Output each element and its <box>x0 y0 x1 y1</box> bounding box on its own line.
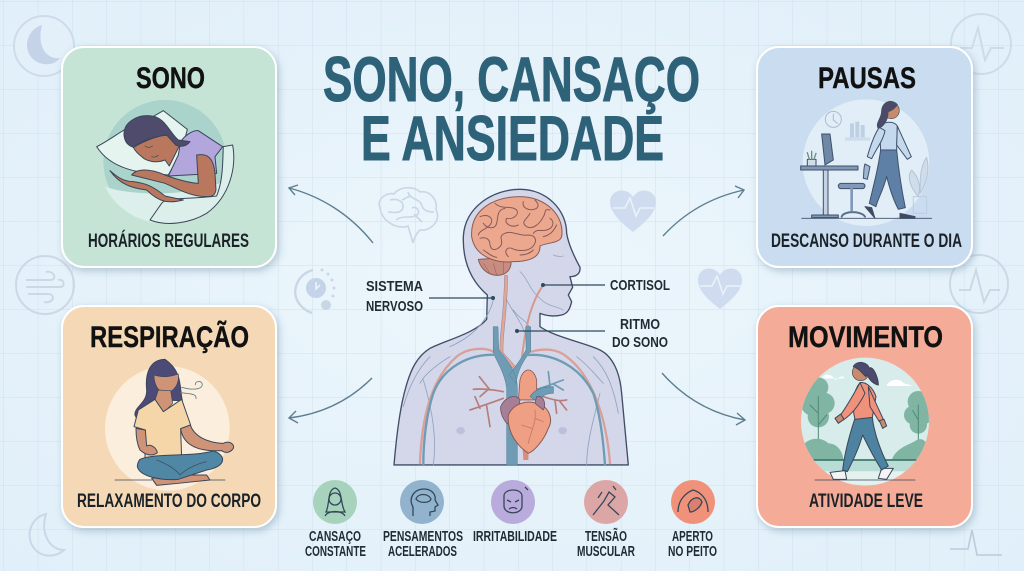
heading: pausas: PAUSAS <box>818 62 916 95</box>
decorative icon: heart with pulse <box>698 269 742 309</box>
body silhouette <box>394 189 628 465</box>
symptom: aperto no peito: APERTO <box>672 529 713 545</box>
illustration: sleeping woman <box>97 100 234 223</box>
decorative icon: wind circle left <box>16 256 74 314</box>
caption: atividade leve: ATIVIDADE LEVE <box>809 491 923 512</box>
panel: movimento <box>757 306 972 527</box>
illustration: woman meditating <box>105 359 234 491</box>
symptom: tensao muscular: MUSCULAR <box>577 544 635 560</box>
nipples <box>456 427 567 434</box>
decorative icon: moon top left <box>14 16 74 76</box>
title: E ANSIEDADE <box>361 104 664 174</box>
label: cortisol <box>541 277 670 294</box>
heading: sono: SONO <box>136 62 205 95</box>
symptom: pensamentos acelerados <box>383 480 463 560</box>
nerves <box>403 300 618 465</box>
panel: sono <box>62 47 276 267</box>
caption: relaxamento do corpo: RELAXAMENTO DO CORPO <box>77 491 261 512</box>
symptom: irritabilidade <box>473 480 557 545</box>
symptom: tensao muscular: TENSÃO <box>585 527 627 545</box>
label: sistema nervoso: SISTEMA <box>366 278 423 295</box>
heading: respiracao: RESPIRAÇÃO <box>90 320 249 354</box>
arrow: to sono <box>289 185 373 243</box>
title <box>323 45 700 174</box>
symptom: tensao muscular <box>577 480 635 560</box>
label: ritmo do sono: DO SONO <box>612 334 668 351</box>
label: ritmo do sono: RITMO <box>620 316 660 333</box>
decorative icon: clock bulb <box>295 268 336 313</box>
decorative icon: moon bottom left <box>30 514 64 556</box>
arrow: to respiracao <box>289 378 372 423</box>
brain <box>472 197 562 275</box>
heading: movimento: MOVIMENTO <box>788 321 943 354</box>
label: sistema nervoso <box>366 278 495 315</box>
pink vessels <box>420 277 610 463</box>
central human figure <box>394 189 628 465</box>
panel: pausas <box>757 47 972 267</box>
heart <box>501 397 520 427</box>
symptom: cansaco constante: CONSTANTE <box>305 544 366 560</box>
label: ritmo do sono <box>515 316 668 351</box>
arrow: to pausas <box>663 186 744 236</box>
decorative icon: heart <box>610 191 656 232</box>
decorative icon: pulse line bottom right <box>950 530 1002 555</box>
title: SONO, CANSAÇO <box>323 45 700 115</box>
decorative icon: pulse circle right <box>950 255 1008 313</box>
decorative icon: pulse circle top right <box>951 14 1011 74</box>
label: cortisol: CORTISOL <box>610 277 670 294</box>
symptom: irritabilidade: IRRITABILIDADE <box>473 529 557 545</box>
panel: respiracao <box>62 306 276 527</box>
lungs branches <box>470 377 503 427</box>
face details <box>520 255 563 310</box>
symptom: aperto no peito <box>668 480 717 560</box>
label: sistema nervoso: NERVOSO <box>366 298 423 315</box>
illustration: woman leaving desk <box>801 99 932 226</box>
symptom: aperto no peito: NO PEITO <box>668 544 717 560</box>
symptom: pensamentos acelerados: PENSAMENTOS <box>383 529 463 545</box>
symptom: cansaco constante: CANSAÇO <box>309 529 361 545</box>
decorative icon: brain outline <box>379 188 438 243</box>
symptom: pensamentos acelerados: ACELERADOS <box>388 544 457 560</box>
symptom: cansaco constante <box>305 480 366 560</box>
caption: horarios regulares: HORÁRIOS REGULARES <box>88 230 249 252</box>
illustration: woman walking <box>797 358 933 486</box>
blue vessels <box>493 327 531 465</box>
aorta <box>518 370 537 400</box>
arrow: to movimento <box>662 373 745 425</box>
